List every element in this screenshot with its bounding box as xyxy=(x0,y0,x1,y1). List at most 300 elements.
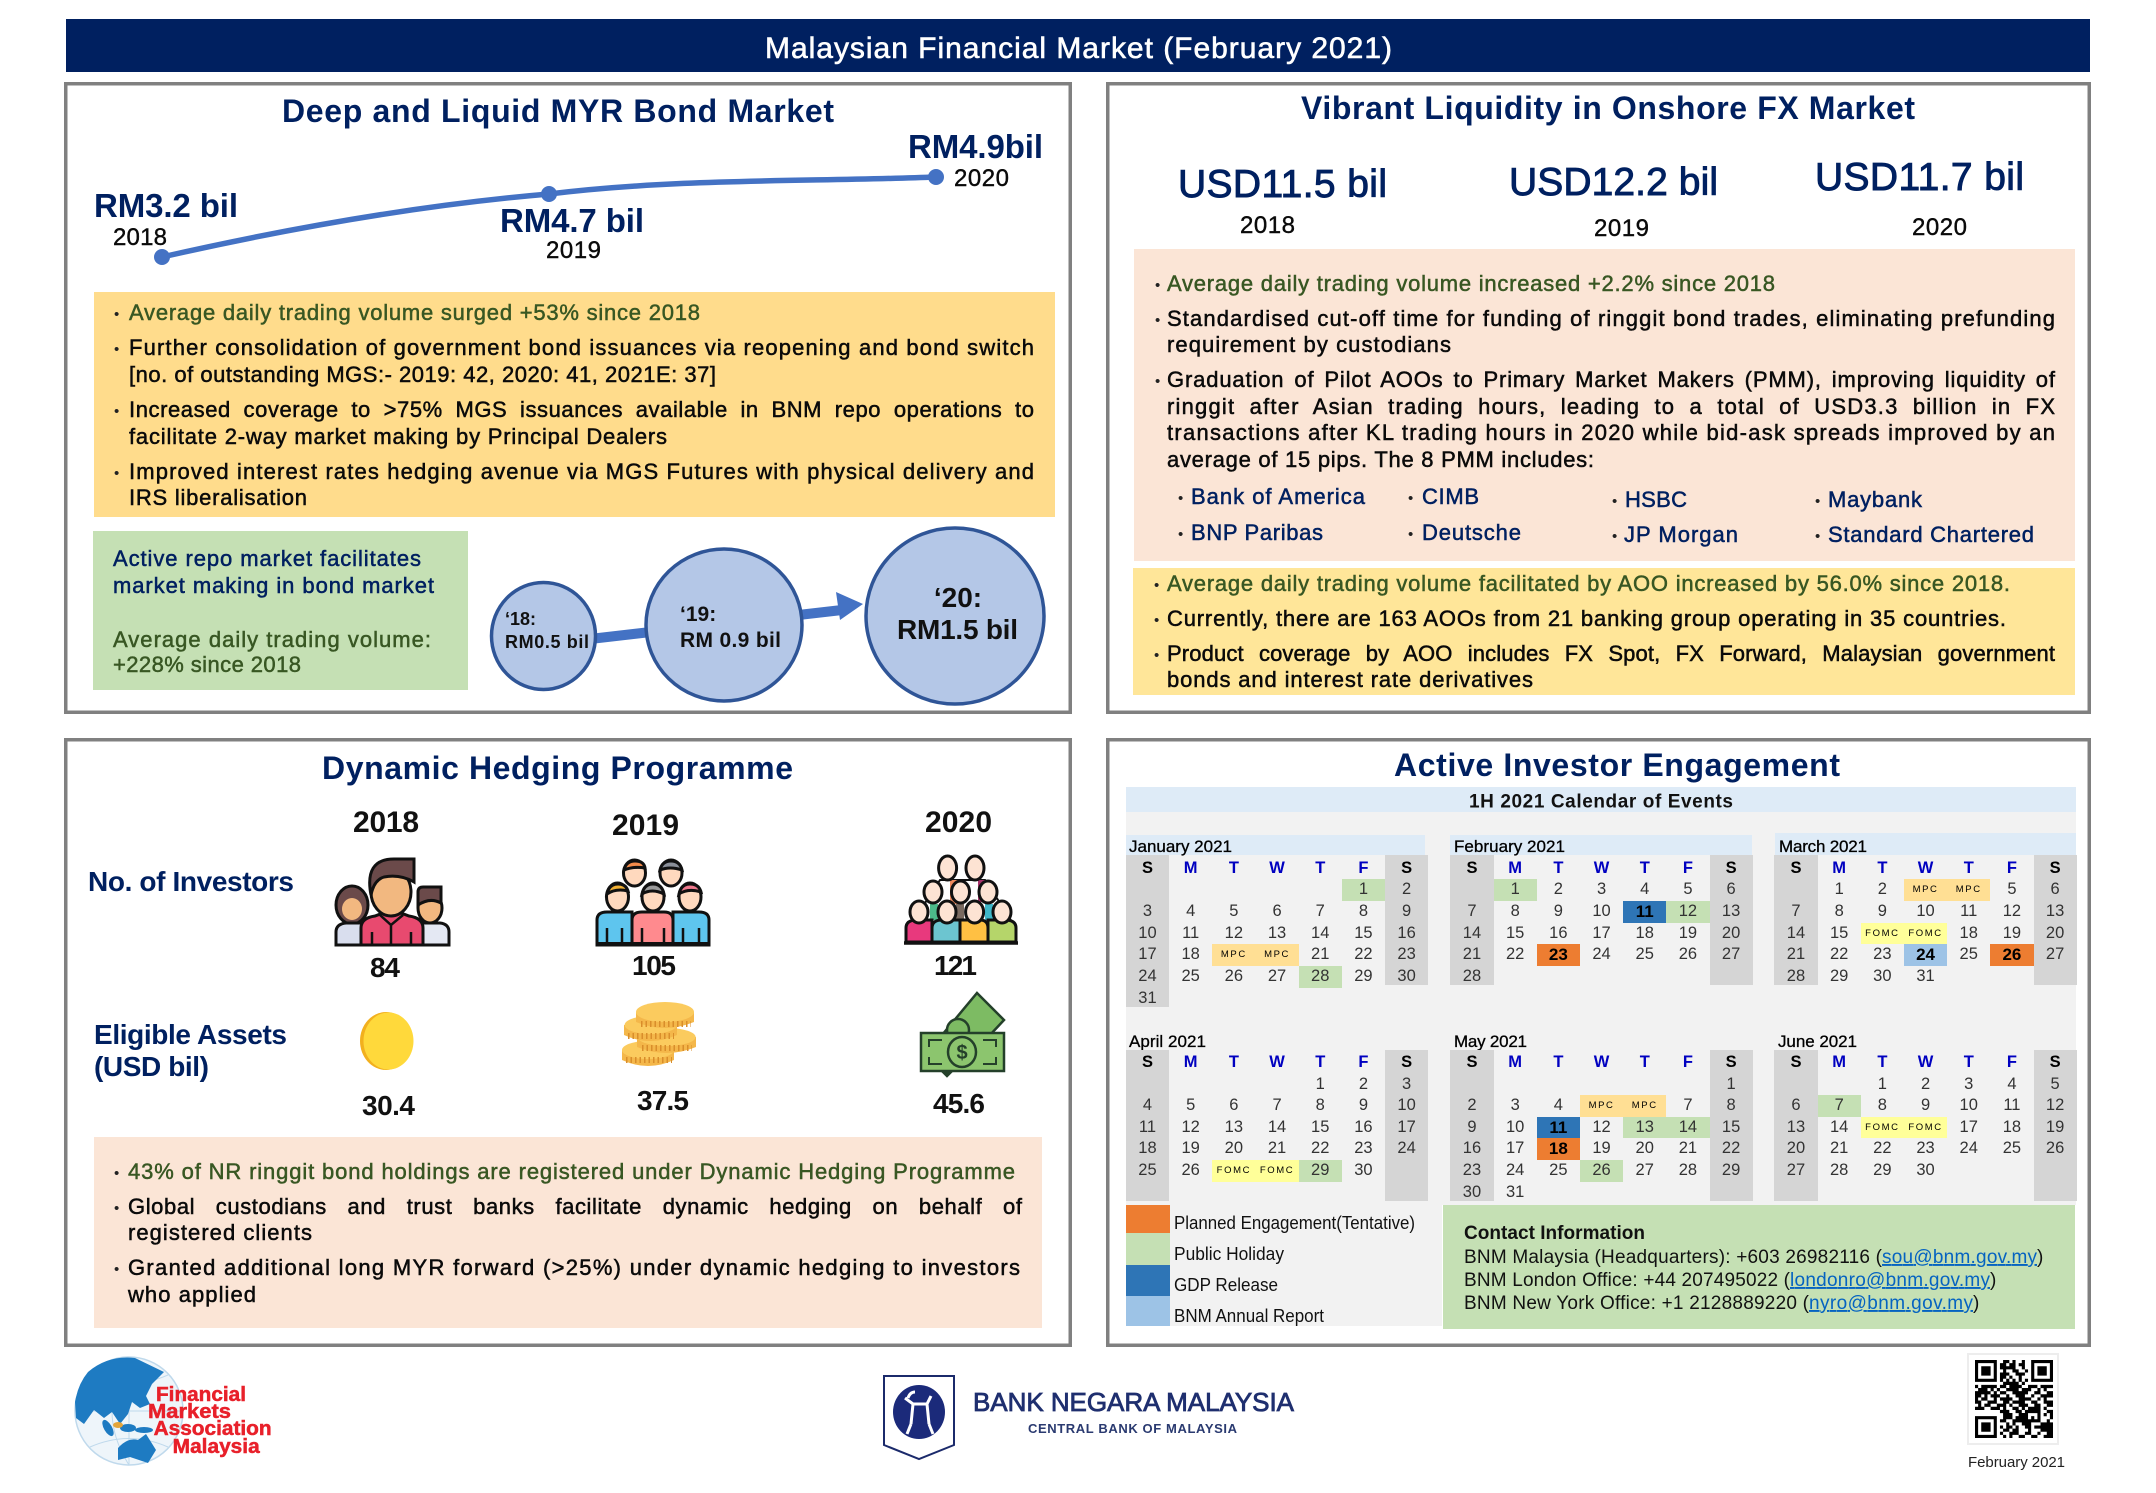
calendar: March 2021: F xyxy=(2007,859,2017,877)
calendar: June 2021: 19 xyxy=(2046,1118,2064,1136)
calendar: March 2021: W xyxy=(1918,859,1933,877)
calendar: February 2021: 13 xyxy=(1722,902,1740,920)
list: primary market makers: • xyxy=(1612,493,1617,510)
calendar: May 2021: 10 xyxy=(1506,1118,1524,1136)
text block: hedging bullets: • xyxy=(114,1200,119,1217)
text block: FX market bullets: requirement by custodians xyxy=(1167,332,1451,357)
text block: AOO bullets: • xyxy=(1154,577,1159,594)
text block: FX market bullets: transactions after KL trading hours in 2020 while bid-ask spreads improved by an xyxy=(1167,420,2055,445)
calendar: April 2021: W xyxy=(1269,1053,1285,1071)
calendar: January 2021: 5 xyxy=(1229,902,1238,920)
text block: FX market bullets: • xyxy=(1155,373,1160,390)
month headings: second quarter: May 2021 xyxy=(1454,1032,1527,1051)
calendar: April 2021: S xyxy=(1401,1053,1412,1071)
calendar: February 2021: F xyxy=(1683,859,1693,877)
calendar: January 2021: 22 xyxy=(1354,945,1373,963)
calendar: March 2021: 12 xyxy=(2003,902,2021,920)
text block: hedging bullets xyxy=(94,1137,1042,1328)
calendar: March 2021: 1 xyxy=(1835,880,1844,898)
calendar: April 2021: 24 xyxy=(1397,1139,1416,1157)
calendar: March 2021: 26 xyxy=(2002,945,2021,964)
asset values: 45.6 xyxy=(933,1088,985,1119)
stat: 2018 FX volume: 2018 xyxy=(1240,212,1295,239)
icon: investors 2020 xyxy=(904,856,1018,943)
calendar: January 2021: F xyxy=(1358,859,1368,877)
calendar: May 2021: 30 xyxy=(1463,1183,1481,1201)
calendar: January 2021: T xyxy=(1229,859,1239,877)
calendar: May 2021: W xyxy=(1594,1053,1609,1071)
text block: AOO bullets: bonds and interest rate derivatives xyxy=(1167,667,1533,692)
contact information: ) xyxy=(1973,1293,1979,1314)
calendar: March 2021: 25 xyxy=(1960,945,1978,963)
calendar: April 2021: 10 xyxy=(1397,1096,1416,1114)
circles: repo volume: RM1.5 bil xyxy=(897,614,1018,645)
calendar: April 2021 xyxy=(1126,1050,1428,1201)
calendar: January 2021: 16 xyxy=(1397,924,1416,942)
text block: bond market bullets: Improved interest rates hedging avenue via MGS Futures with physical delivery and xyxy=(129,459,1034,484)
list: primary market makers: HSBC xyxy=(1625,487,1687,512)
calendar: February 2021: S xyxy=(1466,859,1477,877)
callout: repo market xyxy=(93,531,468,690)
list: primary market makers: JP Morgan xyxy=(1624,522,1738,547)
calendar: May 2021: 29 xyxy=(1722,1161,1740,1179)
calendar: January 2021: 30 xyxy=(1397,967,1416,985)
calendar: February 2021: 19 xyxy=(1679,924,1697,942)
calendar: January 2021: 24 xyxy=(1138,967,1157,985)
calendar: May 2021: T xyxy=(1640,1053,1650,1071)
text block: AOO bullets: Currently, there are 163 AOOs from 21 banking group operating in 35 countries. xyxy=(1167,606,2006,631)
calendar: March 2021: 7 xyxy=(1791,902,1801,920)
calendar: March 2021: T xyxy=(1877,859,1887,877)
calendar: June 2021: 13 xyxy=(1787,1118,1805,1136)
calendar: March 2021: 19 xyxy=(2003,924,2021,942)
calendar: May 2021: MPC xyxy=(1589,1100,1614,1111)
calendar: January 2021 xyxy=(1126,855,1428,1007)
calendar: January 2021: S xyxy=(1142,859,1153,877)
calendar: February 2021: S xyxy=(1726,859,1737,877)
calendar: May 2021: T xyxy=(1553,1053,1563,1071)
calendar: May 2021: MPC xyxy=(1632,1100,1658,1111)
calendar: April 2021: S xyxy=(1142,1053,1153,1071)
stat: 2020 FX volume: 2020 xyxy=(1912,214,1967,241)
calendar: February 2021: W xyxy=(1594,859,1609,877)
calendar: April 2021: 11 xyxy=(1139,1118,1156,1136)
calendar: February 2021: M xyxy=(1508,859,1522,877)
calendar: February 2021: 7 xyxy=(1467,902,1477,920)
calendar: June 2021: 29 xyxy=(1873,1161,1892,1179)
calendar: June 2021: 4 xyxy=(2007,1074,2017,1092)
date label: February 2021 xyxy=(1968,1454,2065,1471)
calendar: January 2021: 23 xyxy=(1397,945,1416,963)
logo: Bank Negara Malaysia xyxy=(884,1376,1295,1459)
calendar: May 2021: 13 xyxy=(1636,1118,1654,1136)
calendar: February 2021: 15 xyxy=(1506,924,1524,942)
calendar: June 2021: 30 xyxy=(1916,1161,1935,1179)
list: primary market makers: • xyxy=(1815,493,1820,510)
calendar: May 2021: 23 xyxy=(1463,1161,1481,1179)
text block: hedging bullets: 43% of NR ringgit bond holdings are registered under Dynamic Hedging Programme xyxy=(128,1159,1015,1184)
calendar: February 2021: 23 xyxy=(1549,945,1568,964)
calendar: March 2021: 29 xyxy=(1830,967,1848,985)
calendar: April 2021: 8 xyxy=(1316,1096,1325,1114)
month headings: first quarter: March 2021 xyxy=(1779,837,1867,856)
panel: Vibrant Liquidity in Onshore FX Market xyxy=(1106,82,2091,714)
stat: 2020 FX volume: USD11.7 bil xyxy=(1815,156,2024,199)
text block: FX market bullets: average of 15 pips. The 8 PMM includes: xyxy=(1167,447,1594,472)
icon: investors 2019 xyxy=(596,860,710,945)
calendar: April 2021: 3 xyxy=(1402,1074,1411,1092)
calendar: June 2021: 10 xyxy=(1960,1096,1978,1114)
calendar: June 2021 xyxy=(1774,1050,2077,1201)
calendar: February 2021: 14 xyxy=(1463,924,1481,942)
calendar: May 2021: F xyxy=(1683,1053,1693,1071)
calendar: April 2021: 16 xyxy=(1354,1118,1373,1136)
calendar: April 2021: 14 xyxy=(1268,1118,1286,1136)
calendar: April 2021: 6 xyxy=(1229,1096,1238,1114)
callout: repo market: Average daily trading volume: xyxy=(113,627,431,652)
calendar: March 2021: 9 xyxy=(1878,902,1887,920)
calendar: May 2021: 9 xyxy=(1467,1118,1477,1136)
calendar: May 2021: 11 xyxy=(1549,1118,1567,1137)
calendar: February 2021: 20 xyxy=(1722,924,1740,942)
calendar: June 2021: 5 xyxy=(2051,1074,2060,1092)
text block: bond market bullets: IRS liberalisation xyxy=(129,485,307,510)
calendar: May 2021: 16 xyxy=(1463,1139,1481,1157)
contact information: londonro@bnm.gov.my xyxy=(1790,1270,1990,1291)
calendar: April 2021: 19 xyxy=(1181,1139,1200,1157)
heading: FX market: Vibrant Liquidity in Onshore FX Market xyxy=(1301,90,1915,126)
calendar: May 2021: M xyxy=(1508,1053,1522,1071)
legend: Public Holiday xyxy=(1174,1244,1284,1264)
calendar: May 2021: 31 xyxy=(1506,1183,1524,1201)
heading: investor engagement: Active Investor Engagement xyxy=(1394,747,1840,783)
line chart: average daily trading volume: 2020 xyxy=(954,165,1009,192)
calendar: January 2021: 17 xyxy=(1138,945,1157,963)
arrow: repo volume growth xyxy=(590,592,863,639)
year labels: 2019 xyxy=(612,809,679,842)
list: primary market makers: • xyxy=(1815,528,1820,545)
year labels: 2020 xyxy=(925,806,992,839)
calendar: February 2021: 12 xyxy=(1679,902,1697,920)
calendar: June 2021: 25 xyxy=(2003,1139,2021,1157)
logo: Financial Markets Association Malaysia: Markets xyxy=(148,1401,231,1423)
text block: bond market bullets: [no. of outstanding MGS:- 2019: 42, 2020: 41, 2021E: 37] xyxy=(129,362,716,387)
callout: repo market: market making in bond market xyxy=(113,573,434,598)
text block: FX market bullets: Standardised cut-off time for funding of ringgit bond trades, eliminating prefunding xyxy=(1167,306,2055,331)
calendar: March 2021: 11 xyxy=(1960,902,1977,920)
calendar: May 2021: 19 xyxy=(1592,1139,1611,1157)
calendar: May 2021: 28 xyxy=(1679,1161,1697,1179)
calendar: January 2021: MPC xyxy=(1221,949,1247,960)
calendar: March 2021: MPC xyxy=(1956,884,1982,895)
calendar: June 2021: 24 xyxy=(1960,1139,1978,1157)
calendar: March 2021: 23 xyxy=(1873,945,1892,963)
calendar: April 2021: T xyxy=(1315,1053,1325,1071)
text block: bond market bullets: • xyxy=(114,465,119,482)
text block: FX market bullets: • xyxy=(1155,277,1160,294)
calendar: April 2021: 7 xyxy=(1272,1096,1282,1114)
calendar: May 2021: 3 xyxy=(1511,1096,1520,1114)
calendar: June 2021: 12 xyxy=(2046,1096,2064,1114)
calendar: May 2021: 14 xyxy=(1679,1118,1697,1136)
calendar: May 2021 xyxy=(1450,1050,1753,1201)
line chart: average daily trading volume: RM3.2 bil xyxy=(94,187,238,224)
text block: AOO bullets: Product coverage by AOO includes FX Spot, FX Forward, Malaysian government xyxy=(1167,641,2055,666)
investor counts xyxy=(370,950,977,983)
text block: bond market bullets: Further consolidation of government bond issuances via reopening and bond switch xyxy=(129,335,1034,360)
text block: hedging bullets: • xyxy=(114,1165,119,1182)
calendar: March 2021: 27 xyxy=(2046,945,2064,963)
calendar: February 2021: 5 xyxy=(1683,880,1693,898)
text block: bond market bullets: Average daily trading volume surged +53% since 2018 xyxy=(129,300,700,325)
calendar: June 2021: 28 xyxy=(1830,1161,1848,1179)
calendar: January 2021: 14 xyxy=(1311,924,1329,942)
month headings: second quarter xyxy=(1129,1032,1857,1051)
calendar: February 2021: 18 xyxy=(1636,924,1654,942)
list: primary market makers: • xyxy=(1408,490,1413,507)
calendar: June 2021: 22 xyxy=(1873,1139,1892,1157)
calendar: May 2021: 4 xyxy=(1554,1096,1563,1114)
legend: Planned Engagement(Tentative) xyxy=(1174,1213,1415,1233)
calendar: June 2021: 17 xyxy=(1960,1118,1978,1136)
calendar heading xyxy=(1126,787,2076,812)
calendar: February 2021: 28 xyxy=(1463,967,1481,985)
text block: hedging bullets: who applied xyxy=(127,1282,256,1307)
calendar: May 2021: 12 xyxy=(1592,1118,1611,1136)
calendar: February 2021: 1 xyxy=(1511,880,1520,898)
calendar: January 2021: S xyxy=(1401,859,1412,877)
investor counts: 84 xyxy=(370,952,400,983)
calendar: May 2021: 20 xyxy=(1636,1139,1654,1157)
calendar: January 2021: 25 xyxy=(1181,967,1200,985)
list: primary market makers: • xyxy=(1178,490,1183,507)
logo: Financial Markets Association Malaysia xyxy=(75,1357,272,1465)
calendar: June 2021: 3 xyxy=(1964,1074,1973,1092)
calendar: March 2021: 8 xyxy=(1835,902,1844,920)
investor counts: 121 xyxy=(934,950,977,981)
calendar: June 2021: 1 xyxy=(1878,1074,1887,1092)
calendar: June 2021: T xyxy=(1877,1053,1887,1071)
legend: BNM Annual Report xyxy=(1174,1306,1324,1326)
calendar: May 2021: 21 xyxy=(1679,1139,1697,1157)
calendar: February 2021: 8 xyxy=(1511,902,1520,920)
line chart: average daily trading volume: 2018 xyxy=(113,224,167,251)
calendar: January 2021: 31 xyxy=(1138,989,1157,1007)
row label: eligible assets xyxy=(94,1019,287,1082)
calendar: March 2021: 2 xyxy=(1878,880,1887,898)
calendar: January 2021: 13 xyxy=(1268,924,1286,942)
text block: AOO bullets: • xyxy=(1154,647,1159,664)
list: primary market makers: CIMB xyxy=(1422,484,1479,509)
heading: bond market: Deep and Liquid MYR Bond Market xyxy=(282,93,834,129)
circles: repo volume xyxy=(492,528,1044,704)
calendar: June 2021: 21 xyxy=(1830,1139,1848,1157)
icon: single coin xyxy=(360,1012,414,1070)
logo: Bank Negara Malaysia: BANK NEGARA MALAYSIA xyxy=(973,1387,1295,1417)
year labels: 2018 xyxy=(353,806,419,839)
calendar: March 2021: M xyxy=(1832,859,1846,877)
calendar: January 2021: 10 xyxy=(1138,924,1157,942)
month headings: first quarter xyxy=(1126,833,2076,856)
text block: hedging bullets: • xyxy=(114,1261,119,1278)
calendar: April 2021: 1 xyxy=(1316,1074,1325,1092)
calendar: April 2021: 2 xyxy=(1359,1074,1368,1092)
calendar: January 2021: 28 xyxy=(1311,967,1329,985)
contact information: BNM Malaysia (Headquarters): +603 26982116 ( xyxy=(1464,1247,1883,1268)
calendar: February 2021: 26 xyxy=(1679,945,1697,963)
list: primary market makers: • xyxy=(1178,526,1183,543)
text block: AOO bullets: • xyxy=(1154,612,1159,629)
calendar: February 2021: 10 xyxy=(1592,902,1611,920)
calendar: January 2021: 9 xyxy=(1402,902,1411,920)
calendar: May 2021: 1 xyxy=(1727,1074,1736,1092)
calendar: March 2021: FOMC xyxy=(1865,928,1900,939)
calendar: January 2021: T xyxy=(1315,859,1325,877)
calendar: March 2021: S xyxy=(2050,859,2061,877)
calendar: January 2021: W xyxy=(1269,859,1285,877)
calendar: January 2021: 27 xyxy=(1268,967,1286,985)
calendar: March 2021: 15 xyxy=(1830,924,1848,942)
list: primary market makers: Bank of America xyxy=(1191,484,1366,509)
asset values: 30.4 xyxy=(362,1090,415,1121)
calendar: March 2021: 5 xyxy=(2007,880,2017,898)
calendar: May 2021: 18 xyxy=(1549,1139,1568,1158)
calendar: February 2021 xyxy=(1450,855,1753,985)
calendar: April 2021: 17 xyxy=(1397,1118,1416,1136)
contact information: nyro@bnm.gov.my xyxy=(1809,1293,1974,1314)
year labels xyxy=(353,806,992,842)
calendar: February 2021: 11 xyxy=(1636,902,1654,921)
calendar: January 2021: M xyxy=(1184,859,1198,877)
calendar: April 2021: 29 xyxy=(1311,1161,1329,1179)
text block: FX market bullets: • xyxy=(1155,312,1160,329)
row label: eligible assets: (USD bil) xyxy=(94,1051,209,1082)
calendar: January 2021: 26 xyxy=(1225,967,1243,985)
calendar: April 2021: 26 xyxy=(1181,1161,1200,1179)
calendar: June 2021: S xyxy=(2050,1053,2061,1071)
calendar: May 2021: 26 xyxy=(1592,1161,1611,1179)
list: primary market makers: BNP Paribas xyxy=(1191,520,1323,545)
asset values: 37.5 xyxy=(637,1085,689,1116)
calendar: June 2021: 20 xyxy=(1787,1139,1805,1157)
calendar: June 2021: 23 xyxy=(1916,1139,1935,1157)
calendar: April 2021: FOMC xyxy=(1260,1165,1294,1176)
calendar: April 2021: 21 xyxy=(1268,1139,1286,1157)
title banner xyxy=(66,19,2090,72)
calendar: January 2021: MPC xyxy=(1264,949,1290,960)
panel: Active Investor Engagement xyxy=(1106,738,2091,1347)
contact information: ) xyxy=(2037,1247,2043,1268)
calendar: June 2021: 7 xyxy=(1835,1096,1844,1114)
calendar: February 2021: T xyxy=(1640,859,1650,877)
calendar: January 2021: 8 xyxy=(1359,902,1368,920)
calendar: March 2021: 14 xyxy=(1787,924,1805,942)
calendar: January 2021: 2 xyxy=(1402,880,1411,898)
calendar: April 2021: 22 xyxy=(1311,1139,1329,1157)
calendar: February 2021: 6 xyxy=(1727,880,1736,898)
text block: FX market bullets: Average daily trading volume increased +2.2% since 2018 xyxy=(1167,271,1775,296)
logo: Financial Markets Association Malaysia: Financial xyxy=(156,1384,246,1406)
text block: bond market bullets xyxy=(94,292,1055,517)
calendar: June 2021: M xyxy=(1832,1053,1846,1071)
stat: 2020 FX volume xyxy=(1815,156,2024,241)
calendar: March 2021: 20 xyxy=(2046,924,2064,942)
calendar heading: 1H 2021 Calendar of Events xyxy=(1469,792,1733,812)
calendar: January 2021: 29 xyxy=(1354,967,1373,985)
calendar: May 2021: 2 xyxy=(1467,1096,1477,1114)
list: primary market makers: Standard Chartered xyxy=(1828,522,2034,547)
calendar: April 2021: 4 xyxy=(1143,1096,1152,1114)
line chart: average daily trading volume: RM4.7 bil xyxy=(500,202,644,239)
calendar: March 2021: 10 xyxy=(1916,902,1935,920)
calendar: June 2021: 2 xyxy=(1921,1074,1930,1092)
calendar: June 2021: FOMC xyxy=(1865,1122,1900,1133)
calendar: April 2021: 23 xyxy=(1354,1139,1373,1157)
calendar: April 2021: 18 xyxy=(1138,1139,1157,1157)
stat: 2018 FX volume: USD11.5 bil xyxy=(1178,163,1387,206)
text block: bond market bullets: • xyxy=(114,341,119,358)
circles: repo volume: ‘20: xyxy=(934,582,982,613)
logo: Financial Markets Association Malaysia: Association xyxy=(154,1418,272,1440)
stat: 2019 FX volume xyxy=(1509,161,1718,242)
calendar: May 2021: 25 xyxy=(1549,1161,1568,1179)
line chart: average daily trading volume: 2019 xyxy=(546,237,601,264)
QR code xyxy=(1968,1354,2058,1444)
logo: Bank Negara Malaysia: CENTRAL BANK OF MALAYSIA xyxy=(1028,1421,1238,1436)
icon: coin stack xyxy=(622,1002,696,1066)
line chart: average daily trading volume: RM4.9bil xyxy=(908,128,1043,165)
calendar: January 2021: 3 xyxy=(1143,902,1152,920)
calendar: January 2021: 6 xyxy=(1272,902,1282,920)
text block: FX market bullets: Graduation of Pilot AOOs to Primary Market Makers (PMM), improving liquidity of xyxy=(1167,367,2056,392)
text block: AOO bullets xyxy=(1133,568,2075,695)
line chart: average daily trading volume xyxy=(94,128,1043,265)
row label: eligible assets: Eligible Assets xyxy=(94,1019,287,1050)
circles: repo volume: RM0.5 bil xyxy=(505,632,589,652)
text block: FX market bullets: ringgit after Asian trading hours, leading to a total of USD3.3 billion in FX xyxy=(1167,394,2055,419)
text block: AOO bullets: Average daily trading volume facilitated by AOO increased by 56.0% since 2018. xyxy=(1167,571,2010,596)
icon: banknotes xyxy=(921,993,1004,1076)
calendar: June 2021: 11 xyxy=(2003,1096,2020,1114)
calendar: February 2021: 3 xyxy=(1597,880,1606,898)
calendar: March 2021: MPC xyxy=(1913,884,1938,895)
calendar: April 2021: 20 xyxy=(1225,1139,1243,1157)
calendar: June 2021: F xyxy=(2007,1053,2017,1071)
calendar: February 2021: 2 xyxy=(1554,880,1563,898)
calendar: March 2021 xyxy=(1774,855,2077,985)
calendar: March 2021: 6 xyxy=(2051,880,2060,898)
calendar: April 2021: 9 xyxy=(1359,1096,1368,1114)
calendar: March 2021: 24 xyxy=(1916,945,1935,964)
icon: banknotes: $ xyxy=(956,1042,968,1064)
text block: hedging bullets: registered clients xyxy=(128,1220,312,1245)
list: primary market makers: Deutsche xyxy=(1422,520,1521,545)
calendar: March 2021: 13 xyxy=(2046,902,2064,920)
panel: Deep and Liquid MYR Bond Market xyxy=(64,82,1072,714)
calendar: January 2021: 15 xyxy=(1354,924,1373,942)
list: primary market makers xyxy=(1178,484,2034,547)
calendar: February 2021: 4 xyxy=(1640,880,1649,898)
calendar: April 2021: 13 xyxy=(1225,1118,1243,1136)
text block: bond market bullets: Increased coverage to >75% MGS issuances available in BNM repo operations to xyxy=(129,397,1034,422)
calendar: February 2021: 24 xyxy=(1592,945,1611,963)
logo: Financial Markets Association Malaysia: Malaysia xyxy=(173,1436,261,1458)
contact information: BNM London Office: +44 207495022 ( xyxy=(1464,1270,1791,1291)
calendar: March 2021: FOMC xyxy=(1908,928,1943,939)
calendar: March 2021: 30 xyxy=(1873,967,1892,985)
calendar: January 2021: 21 xyxy=(1311,945,1329,963)
legend xyxy=(1126,1205,1442,1326)
